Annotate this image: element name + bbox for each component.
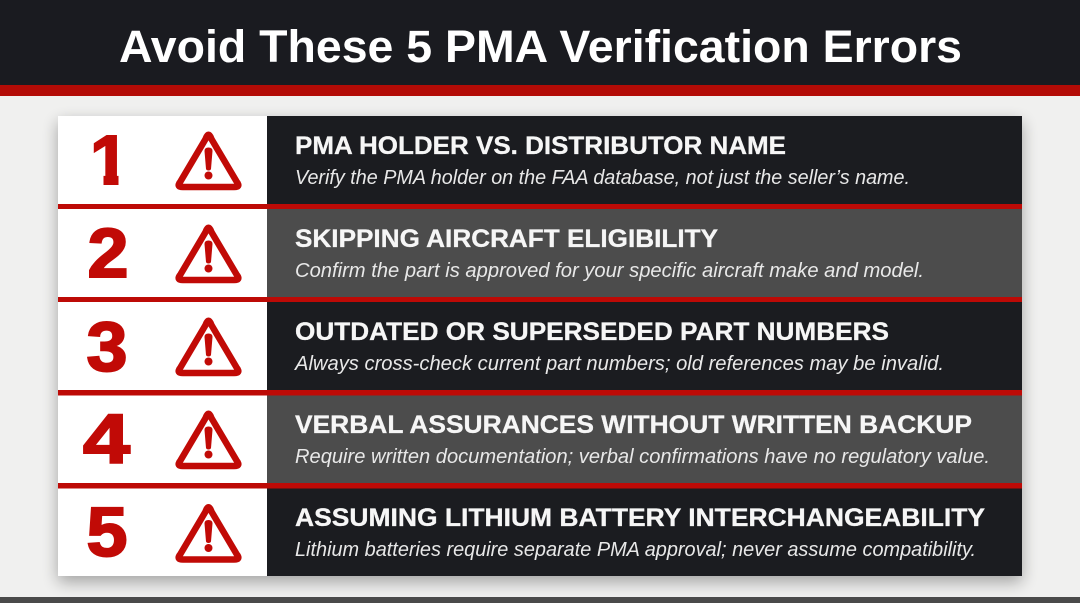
panel: error list [58,116,1022,576]
footer bar [0,597,1080,603]
heading 1: PMA HOLDER VS. DISTRIBUTOR NAME [295,132,786,160]
row 4 [83,400,990,478]
row 5 [86,493,985,571]
heading 5: ASSUMING LITHIUM BATTERY INTERCHANGEABILITY [295,504,985,532]
header banner [0,0,1080,96]
icon: warning triangle 1 [179,135,238,187]
description 2: Confirm the part is approved for your specific aircraft make and model. [295,260,924,282]
number 5: 5 [86,493,128,571]
icon: warning triangle 5 [179,507,238,560]
row 3 [86,308,944,386]
icon: warning triangle 4 [179,414,238,466]
row 2 [88,214,924,292]
number 4: 4 [83,400,130,478]
heading 2: SKIPPING AIRCRAFT ELIGIBILITY [295,225,718,253]
title: Avoid These 5 PMA Verification Errors [119,21,962,72]
heading 4: VERBAL ASSURANCES WITHOUT WRITTEN BACKUP [295,411,972,439]
description 1: Verify the PMA holder on the FAA database, not just the seller’s name. [295,167,910,189]
description 3: Always cross-check current part numbers; old references may be invalid. [294,353,944,375]
description 4: Require written documentation; verbal confirmations have no regulatory value. [295,446,990,468]
number 2: 2 [88,214,128,292]
heading 3: OUTDATED OR SUPERSEDED PART NUMBERS [295,318,889,346]
number 3: 3 [86,308,128,386]
number 1: 1 [90,121,129,199]
row 1 [94,132,908,190]
panel shadow [58,122,1022,582]
icon: warning triangle 3 [179,321,238,373]
icon: warning triangle 2 [179,228,238,280]
description 5: Lithium batteries require separate PMA approval; never assume compatibility. [295,539,976,561]
